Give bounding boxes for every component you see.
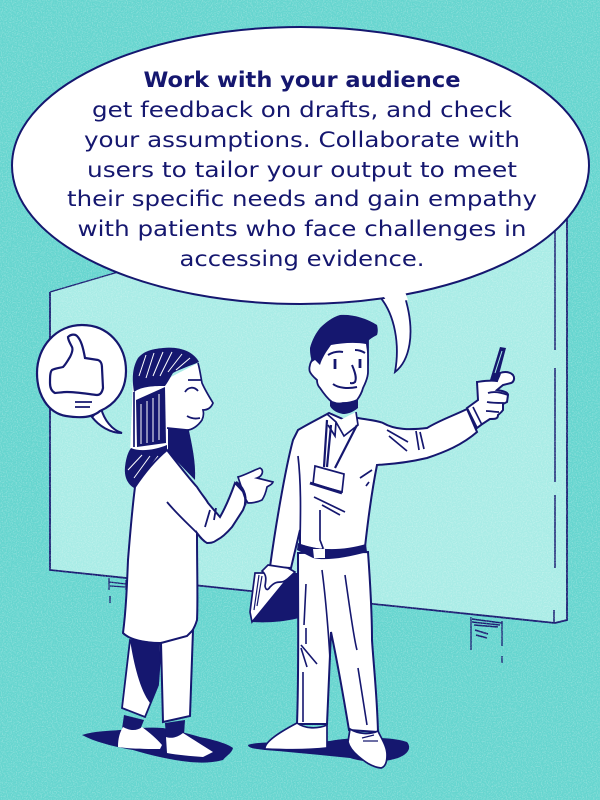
ankles [122,715,144,730]
bubble text: with patients who face challenges in [78,217,526,242]
name badge [313,466,344,492]
board legs [109,578,502,663]
neck [330,399,358,414]
bubble text: get feedback on drafts, and check [92,98,513,123]
lanyard [324,420,357,468]
trousers [297,552,378,732]
shadow under woman [82,728,233,763]
brows eyes mouth [328,350,365,388]
trousers [122,640,161,717]
hand [238,468,273,503]
hand holding folder [262,565,295,590]
hair top [133,348,199,392]
bubble text: accessing evidence. [180,247,424,272]
bubble text: users to tailor your output to meet [87,158,517,183]
collar and tie [327,412,358,436]
hand with pen [467,372,514,428]
hair white underlay [130,380,168,455]
head [309,340,368,404]
main speech bubble [12,27,589,372]
man figure [248,315,514,768]
woman figure [82,348,273,763]
display board [50,200,568,663]
belt [297,543,367,559]
hair strip [136,387,166,447]
hair clump [125,445,167,490]
hair [310,315,378,366]
bubble text [67,68,537,272]
shoes [265,723,327,750]
hair behind neck [167,426,195,480]
face [165,363,213,430]
pen [490,347,506,382]
shoes [118,727,162,749]
thumbs up speech bubble [37,325,126,433]
icon: thumbs up [50,335,103,395]
shirt and arms [270,409,477,568]
shadow under man [248,738,409,762]
coat [123,450,248,643]
bubble text: their specific needs and gain empathy [67,187,537,212]
bubble text: Work with your audience [144,68,460,92]
folder [250,573,292,622]
bubble text: your assumptions. Collaborate with [84,128,520,153]
